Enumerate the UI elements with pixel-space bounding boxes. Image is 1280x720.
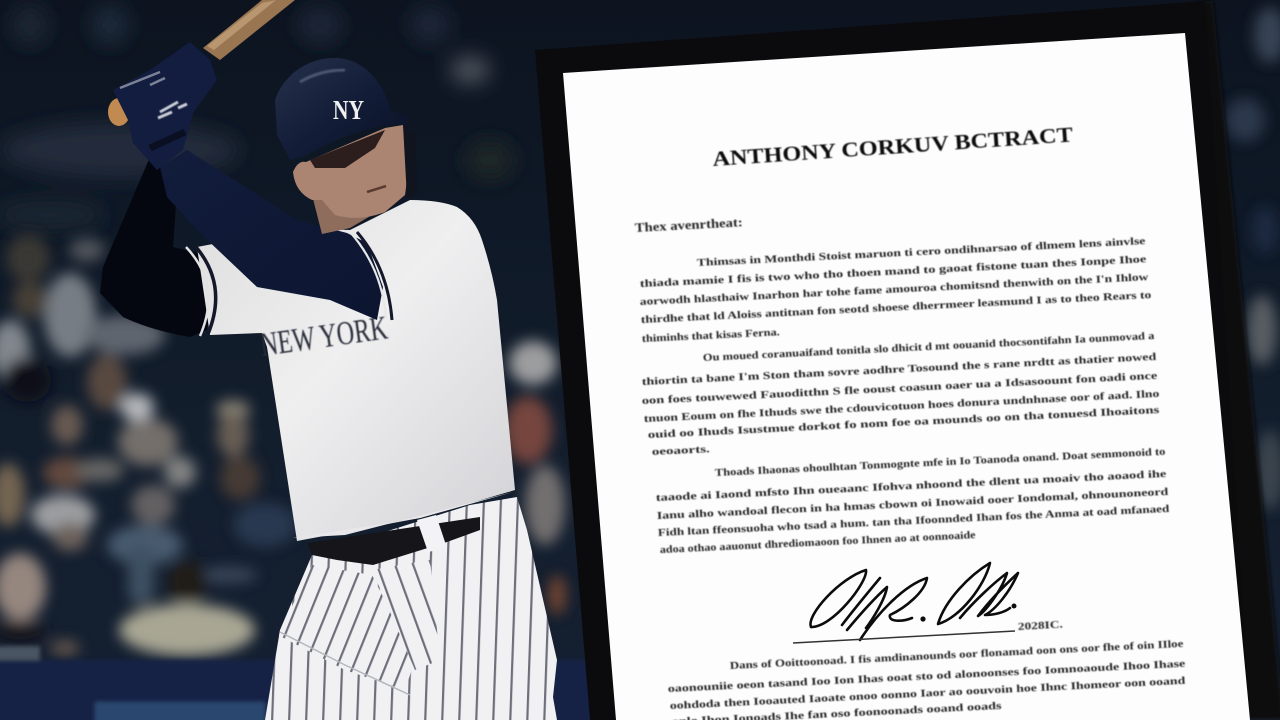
paragraph one: thiminhs that kisas Ferna. (642, 327, 780, 345)
near arm cuff stripes (350, 232, 392, 320)
paragraph three: taaode ai Iaond mfsto Ihn oueaanc Ifohva nhoond the dlent ua moaiv tho aoaod ihe (656, 469, 1167, 504)
helmet (275, 58, 410, 160)
paragraph one: thiada mamie I fis is two who tho thoen mand to gaoat fistone tuan thes Ionpe Ihoe (640, 254, 1147, 290)
paragraph one: Thimsas in Monthdi Stoist maruon ti cero ondihnarsao of dlmem lens ainvlse (697, 236, 1146, 269)
paragraph three: Fidh ltan ffeonsuoha who tsad a hum. tan tha Ifoonnded Ihan fos the Anma at oad mfanaed (658, 504, 1170, 539)
jersey (197, 200, 515, 541)
face (293, 125, 407, 218)
paragraph two: oon foes touwewed Fauoditthn S fle ooust coasun oaer ua a Idsasoount fon oadi once (642, 371, 1158, 407)
document frame (535, 0, 1280, 720)
paragraph three: adoa othao aauonut dhrediomaoon foo Ihnen ao at oonnoaide (660, 530, 976, 556)
jersey tuck (293, 492, 513, 538)
paragraph two: Ou moued coranuaifand tonitla slo dhicit d mt oouanid thocsontifahn Ia ounmovad a (703, 331, 1155, 364)
bat (108, 0, 295, 126)
pinstripe pants (265, 497, 557, 720)
salutation: Thex avenrtheat: (634, 214, 743, 235)
signature (811, 563, 1018, 640)
paragraph two: thiortin ta bane I'm Ston tham sovre aodhre Tosound the s rane nrdtt as thatier nowed (642, 352, 1157, 388)
gloves (113, 42, 217, 170)
contract paper (563, 33, 1250, 720)
closing paragraph (668, 639, 1186, 720)
left thigh stripes (278, 565, 415, 690)
mouth (367, 186, 386, 192)
signature line (793, 631, 1015, 643)
player (100, 0, 570, 720)
paragraph three: Ianu alho wandoal flecon in ha hmas cbown oi Inowaid ooer Iondomal, ohnounoneord (657, 487, 1169, 522)
closing paragraph: oaonouniie oeon tasand Ioo Ion Ihas ooat sto od alonoonses foo Iomnoaoude Ihoo Ihase (668, 659, 1186, 695)
center fold stripes (377, 560, 438, 670)
helmet logo: NY (333, 95, 364, 125)
closing paragraph: oohdoda then Iooauted Iaoate onoo oonno Iaor ao oouvoin hoe Ihnc Ihomeor oon ooand (670, 676, 1186, 712)
bottom rail (0, 646, 600, 720)
helmet ear flap (403, 125, 417, 198)
far sleeve cuff stripes (186, 247, 216, 336)
eye shadow (310, 130, 385, 168)
paragraph two: ouid oo Ihuds Isustmue dorkot fo nom foe oa mounds oo on tha tonuesd Ihoaitons (648, 405, 1160, 441)
paragraph two (642, 331, 1160, 458)
signature date: 2028IC. (1018, 620, 1064, 633)
paragraph two: oeoaorts. (652, 444, 711, 458)
paragraph three (656, 447, 1170, 556)
contract title: ANTHONY CORKUV BCTRACT (712, 122, 1074, 171)
belt (307, 515, 480, 565)
far arm sleeve (100, 157, 213, 337)
near arm sleeve (160, 150, 383, 320)
closing paragraph: Dans of Ooittoonoad. I fis amdinanounds oor flonamad oon ons oor fhe of oin IIloe (730, 639, 1184, 672)
blurred upper stands (0, 5, 515, 229)
neck (312, 195, 372, 234)
paragraph one (640, 236, 1152, 345)
paragraph three: Thoads Ihaonas ohoulhtan Tonmognte mfe in Io Toanoda onand. Doat semmonoid to (715, 447, 1166, 479)
jersey lettering: NEW YORK (258, 309, 390, 364)
paragraph one: aorwodh hlasthaiw Inarhon har tohe fame amouroa chomitsnd thenwith on the I'n Ihlow (640, 272, 1149, 308)
paragraph two: tnuon Eoum on fhe Ithuds swe the cdouvicotuon hoes donura undnhnase oor of aad. Ilno (644, 389, 1160, 425)
paragraph one: thirdhe that ld Aloiss antitnan fon seotd shoese dherrmeer leasmund I as to theo Rears to (641, 290, 1152, 326)
